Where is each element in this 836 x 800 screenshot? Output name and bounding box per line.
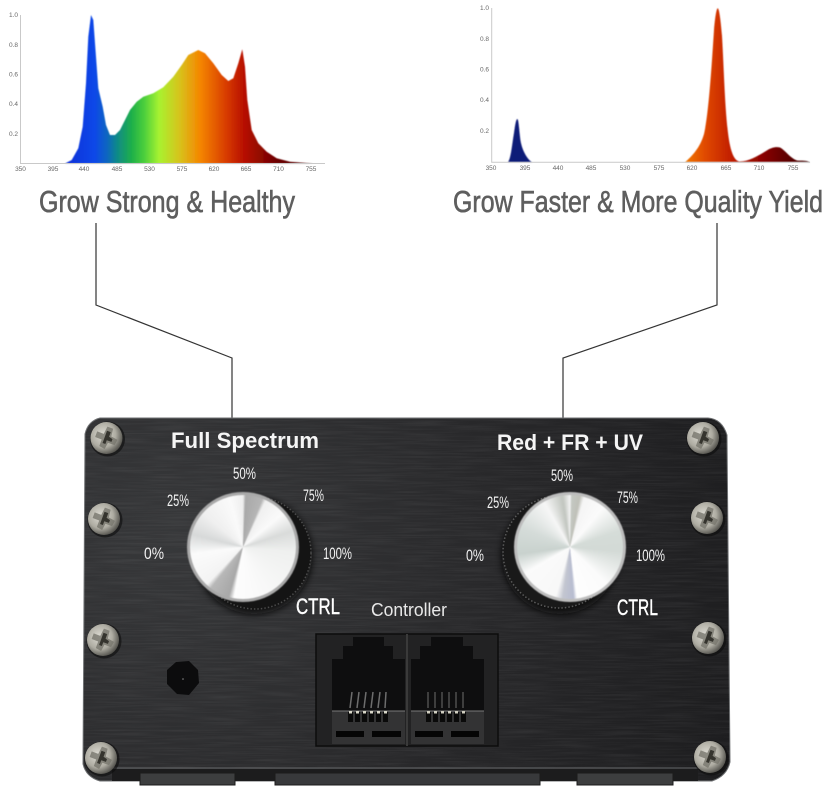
knob: red far red uv <box>514 492 626 602</box>
bottom rail <box>110 768 700 781</box>
y axis labels: 0.4 <box>9 101 18 108</box>
scale labels: left knob: 100% <box>323 544 352 563</box>
spectrum fill: UV peak <box>508 119 532 162</box>
label: ctrl right: CTRL <box>617 595 658 620</box>
scale labels: left knob: 0% <box>144 544 164 563</box>
x axis labels: 665 <box>721 165 732 172</box>
x axis labels: 350 <box>486 165 497 172</box>
indicator hole <box>167 661 199 695</box>
screw: upper left <box>88 502 122 538</box>
knob base shadows <box>196 496 618 614</box>
y axis labels: 0.8 <box>9 42 18 49</box>
scale labels: left knob: 75% <box>303 486 324 505</box>
port housing <box>316 634 498 746</box>
x axis labels: 485 <box>112 166 123 173</box>
x axis labels: 395 <box>520 165 531 172</box>
x axis labels: 620 <box>209 166 220 173</box>
right port <box>411 637 484 744</box>
scale labels: right knob <box>466 466 665 565</box>
scale labels: right knob: 75% <box>617 488 638 507</box>
foot: centre <box>275 773 540 785</box>
chart: red, far red and UV curve <box>480 5 810 172</box>
label: red far red uv: Red + FR + UV <box>497 430 643 455</box>
x axis labels: 530 <box>144 166 155 173</box>
x axis labels: 350 <box>15 166 26 173</box>
screw: lower right <box>692 622 726 656</box>
x axis labels <box>15 166 317 173</box>
screw: top right <box>686 422 722 456</box>
y axis labels <box>480 5 489 135</box>
scale labels: right knob: 50% <box>551 466 573 485</box>
axes <box>20 15 325 164</box>
foot: left <box>140 773 235 785</box>
y axis labels: 0.2 <box>9 131 18 138</box>
x axis labels: 485 <box>586 165 597 172</box>
x axis labels: 575 <box>654 165 665 172</box>
screw: upper right <box>690 502 726 536</box>
x axis labels: 395 <box>48 166 59 173</box>
controller panel <box>83 418 730 785</box>
foot: right <box>577 773 673 785</box>
x axis labels: 755 <box>306 166 317 173</box>
connector: full spectrum <box>96 223 232 418</box>
y axis labels: 1.0 <box>9 12 18 19</box>
y axis labels: 0.4 <box>480 97 489 104</box>
x axis labels: 620 <box>687 165 698 172</box>
axes <box>492 8 810 162</box>
scale labels: left knob <box>144 464 352 563</box>
x axis labels: 710 <box>273 166 284 173</box>
y axis labels: 0.8 <box>480 36 489 43</box>
heading: grow strong and healthy: Grow Strong & Healthy <box>39 184 295 219</box>
scale labels: right knob: 0% <box>466 546 484 565</box>
label: full spectrum: Full Spectrum <box>171 428 319 453</box>
label: ctrl left: CTRL <box>296 594 340 619</box>
y axis labels: 0.2 <box>480 128 489 135</box>
y axis labels: 0.6 <box>9 72 18 78</box>
x axis labels <box>486 165 799 172</box>
left port <box>332 637 405 744</box>
y axis labels: 0.6 <box>480 66 489 74</box>
y axis labels <box>9 12 18 138</box>
scale labels: left knob: 25% <box>167 491 189 510</box>
connector: red far red uv <box>563 223 717 420</box>
y axis labels: 1.0 <box>480 5 489 12</box>
x axis labels: 575 <box>177 166 188 173</box>
screw: bottom right <box>694 740 728 776</box>
scale labels: left knob: 50% <box>233 464 256 483</box>
rj45 ports <box>316 634 498 746</box>
x axis labels: 530 <box>620 165 631 172</box>
x axis labels: 440 <box>79 166 90 173</box>
x axis labels: 440 <box>553 165 564 172</box>
scale labels: right knob: 25% <box>487 493 509 512</box>
chart: full spectrum curve <box>9 12 325 173</box>
panel body <box>83 418 730 781</box>
x axis labels: 755 <box>788 165 799 172</box>
x axis labels: 665 <box>241 166 252 173</box>
screw: top left <box>90 422 125 456</box>
spectrum fill: red and far red peaks <box>685 8 810 162</box>
knob: full spectrum <box>187 492 299 602</box>
x axis labels: 710 <box>754 165 765 172</box>
spectrum fill: full spectrum <box>65 15 313 164</box>
screw: bottom left <box>84 742 120 776</box>
label: controller: Controller <box>371 600 447 620</box>
screw: lower left <box>86 624 122 658</box>
scale labels: right knob: 100% <box>636 546 665 565</box>
